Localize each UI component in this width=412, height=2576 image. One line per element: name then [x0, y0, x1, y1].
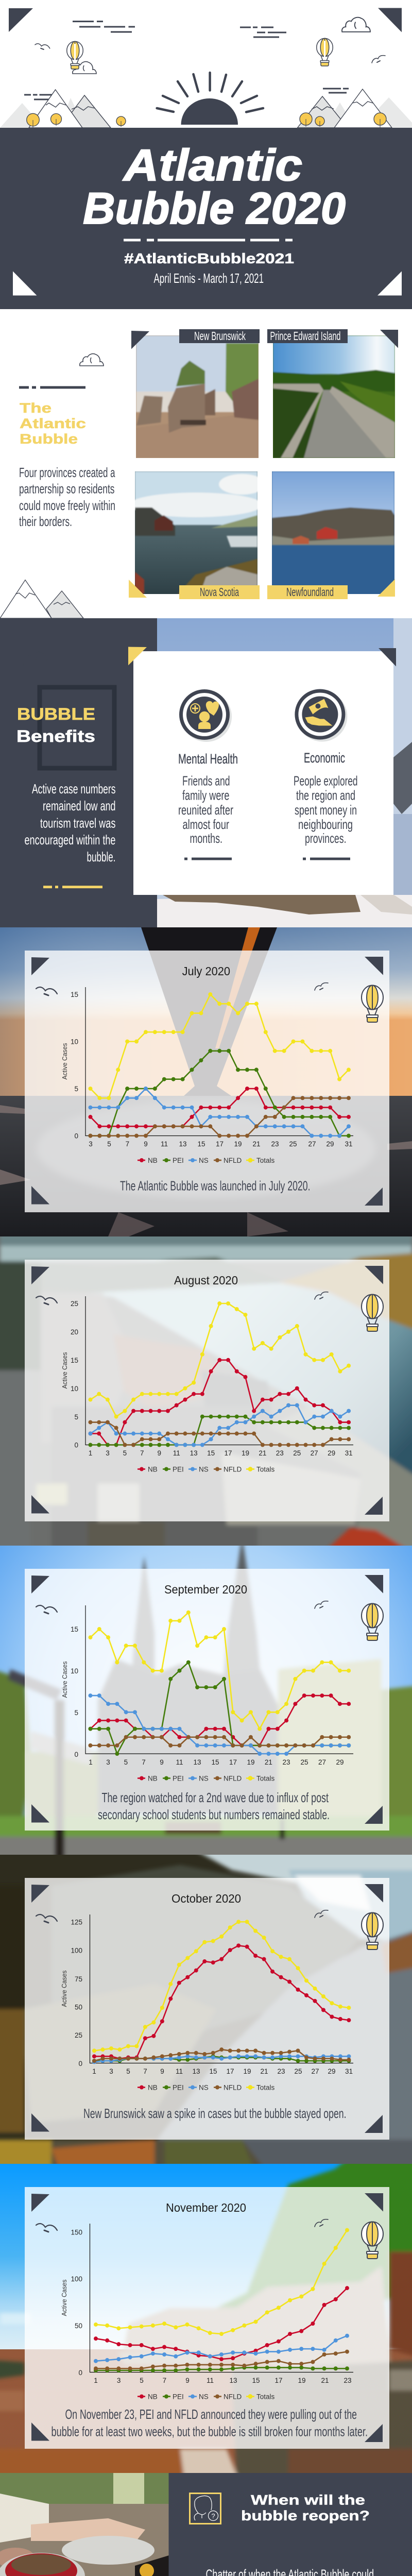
line chart: September 2020: 1	[89, 1758, 93, 1766]
icon: bird	[36, 987, 57, 995]
line chart: August 2020: 5	[74, 1413, 78, 1421]
line chart: October 2020: 125	[71, 1919, 82, 1926]
icon: bird right	[315, 2219, 328, 2227]
line chart: August 2020: Active Cases	[61, 1352, 68, 1389]
corner triangles	[31, 957, 383, 1206]
line chart: July 2020: 0	[74, 1132, 78, 1140]
series: PEI	[94, 2056, 349, 2061]
line chart: September 2020: 11	[176, 1758, 183, 1766]
heading: When will the	[251, 2493, 365, 2508]
icon: bird right	[315, 983, 328, 990]
text: intro paragraph	[19, 465, 115, 529]
legend	[138, 2393, 275, 2401]
line chart: October 2020: 17	[226, 2067, 234, 2075]
legend	[138, 2083, 275, 2092]
heading: Bubble	[20, 431, 78, 447]
series: Totals	[91, 1303, 349, 1417]
chart title: November 2020	[166, 2201, 246, 2214]
line chart: August 2020: 23	[276, 1449, 284, 1457]
legend: NB	[148, 1465, 158, 1473]
series: NFLD	[91, 1422, 349, 1445]
series: NB	[91, 1696, 349, 1745]
panel: September 2020	[0, 1535, 412, 1870]
icon: balloon	[362, 1912, 383, 1950]
province labels: Newfoundland	[286, 585, 334, 599]
chart title: October 2020	[171, 1892, 241, 1905]
series: NFLD	[94, 2049, 349, 2061]
benefit: mental health	[178, 689, 238, 859]
legend	[138, 1774, 275, 1783]
line chart: November 2020: 11	[207, 2377, 214, 2384]
line chart: October 2020: 75	[75, 1975, 82, 1983]
panel: July 2020	[0, 927, 412, 1236]
text	[294, 773, 357, 846]
series: Totals	[91, 1613, 349, 1729]
line chart: September 2020: 23	[282, 1758, 290, 1766]
legend: NFLD	[224, 1465, 242, 1473]
heading	[16, 705, 95, 745]
line chart: November 2020: 3	[117, 2377, 121, 2384]
line chart: August 2020: 15	[207, 1449, 215, 1457]
line chart: September 2020: Active Cases	[61, 1661, 68, 1698]
line chart: August 2020: 13	[190, 1449, 198, 1457]
line chart: July 2020: 11	[161, 1140, 168, 1148]
legend: NS	[199, 2083, 209, 2092]
line chart: October 2020: 13	[192, 2067, 200, 2075]
line chart: September 2020: 9	[160, 1758, 164, 1766]
photo: Prince Edward Island	[273, 335, 395, 458]
icon: bird right	[315, 1910, 328, 1918]
legend: PEI	[173, 1157, 184, 1164]
line chart: August 2020: 15	[71, 1357, 78, 1364]
heading: Atlantic	[20, 416, 86, 431]
translucent card	[25, 951, 389, 1212]
legend: NFLD	[224, 1157, 242, 1164]
line chart: September 2020: 7	[142, 1758, 146, 1766]
text	[178, 773, 233, 846]
line chart: August 2020: 11	[173, 1449, 180, 1457]
series: NS	[91, 1696, 349, 1754]
label: Mental Health	[178, 751, 238, 767]
white benefits card	[133, 651, 393, 895]
legend: Totals	[256, 1157, 275, 1164]
line chart: August 2020: 17	[224, 1449, 232, 1457]
icon: balloon	[362, 985, 383, 1022]
line chart: September 2020: 27	[318, 1758, 326, 1766]
photo: snowy mountain	[157, 618, 412, 927]
legend: Totals	[256, 2393, 275, 2401]
text: intro paragraph: partnership so residents	[19, 481, 114, 497]
line chart: October 2020: 50	[75, 2004, 82, 2011]
icon: balloon	[362, 1603, 383, 1640]
line chart: October 2020: 27	[311, 2067, 319, 2075]
line chart: November 2020: 23	[344, 2377, 352, 2384]
icon: bird	[36, 1296, 57, 1304]
legend: NB	[148, 2083, 158, 2092]
line chart: September 2020: 21	[265, 1758, 272, 1766]
province labels: Nova Scotia	[200, 585, 239, 599]
icon: mental health	[179, 689, 232, 742]
series: Totals	[94, 1922, 349, 2050]
benefit: economic	[294, 689, 357, 859]
line chart: November 2020: 100	[71, 2275, 82, 2283]
line chart: November 2020: 19	[298, 2377, 306, 2384]
line chart: September 2020: 25	[300, 1758, 308, 1766]
legend	[138, 1157, 275, 1164]
chart title: August 2020	[174, 1274, 238, 1287]
line chart: August 2020: 31	[345, 1449, 353, 1457]
line chart: September 2020: 19	[247, 1758, 255, 1766]
line chart: September 2020: 15	[211, 1758, 219, 1766]
corner triangles	[31, 2193, 383, 2442]
hashtag: #AtlanticBubble2021	[124, 250, 294, 266]
icon: cloud	[80, 354, 104, 366]
text: benefits summary: bubble.	[87, 849, 115, 865]
panel: bubble benefits	[0, 618, 412, 927]
line chart: July 2020: 3	[89, 1140, 93, 1148]
legend: NS	[199, 1465, 209, 1473]
line chart: October 2020: 31	[345, 2067, 353, 2075]
translucent card	[25, 1569, 389, 1831]
line chart: September 2020: 5	[124, 1758, 128, 1766]
icon: bird	[36, 2224, 57, 2232]
line chart: August 2020: 9	[158, 1449, 161, 1457]
line chart: July 2020: 15	[71, 991, 78, 998]
line chart: July 2020: 19	[234, 1140, 242, 1148]
series: NFLD	[96, 2352, 347, 2368]
corner triangles	[31, 1266, 383, 1515]
icon: bird	[36, 1914, 57, 1923]
line chart: November 2020: 50	[75, 2322, 82, 2330]
series: NS	[96, 2336, 347, 2361]
line chart: November 2020: 150	[71, 2229, 82, 2236]
line chart: November 2020: 1	[94, 2377, 98, 2384]
line chart: November 2020: Active Cases	[61, 2279, 68, 2316]
line chart: October 2020: 15	[209, 2067, 217, 2075]
series: NS	[91, 1089, 349, 1136]
line chart: August 2020: 0	[74, 1442, 78, 1449]
series: Totals	[96, 2230, 347, 2334]
icon: cloud	[24, 652, 51, 665]
text: provinces.	[305, 831, 346, 846]
title	[83, 141, 346, 233]
line chart: September 2020: 0	[74, 1751, 78, 1758]
line chart: July 2020: 13	[179, 1140, 187, 1148]
legend: Totals	[256, 1774, 275, 1783]
photo: St. John's harbour	[0, 1236, 412, 1546]
heading: BUBBLE	[17, 705, 95, 723]
title: Atlantic	[123, 141, 302, 190]
translucent card	[25, 1260, 389, 1521]
corner triangles	[31, 1575, 383, 1824]
line chart: October 2020: 25	[75, 2031, 82, 2039]
heading: Benefits	[16, 727, 95, 745]
panel: October 2020	[0, 1839, 412, 2179]
legend: NS	[199, 2393, 209, 2401]
text: reunited after	[178, 802, 233, 818]
chart title: September 2020	[164, 1583, 247, 1596]
text: benefits summary: remained low and	[43, 798, 115, 814]
caption	[52, 2406, 368, 2439]
caption: The Atlantic Bubble was launched in July 2020.	[120, 1178, 310, 1194]
legend: NB	[148, 1774, 158, 1783]
text: the region and	[296, 788, 355, 803]
line chart: August 2020: 27	[311, 1449, 318, 1457]
line chart: September 2020: 17	[229, 1758, 237, 1766]
line chart: November 2020: 5	[140, 2377, 144, 2384]
line chart: August 2020: 10	[71, 1385, 78, 1393]
photo: Newfoundland	[272, 471, 394, 594]
illustration: mountains	[0, 580, 83, 618]
line chart: October 2020: 9	[160, 2067, 164, 2075]
line chart: September 2020: 10	[71, 1667, 78, 1675]
line chart: September 2020: 5	[74, 1709, 78, 1717]
icon: balloon	[362, 2222, 383, 2259]
series: NB	[91, 1360, 349, 1445]
series: PEI	[96, 2367, 347, 2370]
panel: the Atlantic Bubble intro	[0, 309, 412, 618]
legend: NB	[148, 2393, 158, 2401]
province labels: New Brunswick	[194, 329, 246, 343]
title: Bubble 2020	[83, 184, 346, 233]
caption	[98, 1790, 330, 1822]
series: Totals	[91, 994, 349, 1098]
text: family were	[182, 788, 230, 803]
photo: Confederation Bridge	[0, 927, 412, 1236]
line chart: August 2020: 19	[242, 1449, 249, 1457]
line chart: August 2020: 29	[328, 1449, 335, 1457]
legend: Totals	[256, 1465, 275, 1473]
text: benefits summary	[25, 781, 115, 865]
line chart: July 2020: 9	[144, 1140, 148, 1148]
text: Friends and	[182, 773, 230, 788]
label: Economic	[304, 750, 345, 766]
text: benefits summary: encouraged within the	[25, 832, 115, 848]
line chart: August 2020: 1	[89, 1449, 92, 1457]
legend: NB	[148, 1157, 158, 1164]
line chart: July 2020: 25	[289, 1140, 297, 1148]
series: NB	[94, 1945, 349, 2059]
legend: PEI	[173, 2083, 184, 2092]
translucent card	[25, 2187, 389, 2449]
line chart: November 2020: 0	[78, 2369, 82, 2377]
line chart: September 2020	[61, 1605, 353, 1783]
text: almost four	[182, 817, 229, 832]
line chart: October 2020: 1	[92, 2067, 96, 2075]
legend: NFLD	[224, 1774, 242, 1783]
icon: economic	[295, 689, 347, 742]
line chart: October 2020: 23	[277, 2067, 285, 2075]
text: months.	[190, 831, 222, 846]
text: intro paragraph: could move freely within	[19, 498, 115, 513]
line chart: October 2020: 5	[126, 2067, 130, 2075]
series: NB	[91, 1089, 349, 1126]
series: NFLD	[91, 1098, 349, 1136]
line chart: November 2020: 7	[163, 2377, 166, 2384]
icon: person with question	[190, 2494, 220, 2523]
heading	[241, 2493, 370, 2523]
legend: NFLD	[224, 2083, 242, 2092]
text: benefits summary: Active case numbers	[32, 781, 115, 796]
icon: bird	[36, 1605, 57, 1614]
line chart: July 2020: 17	[216, 1140, 224, 1148]
photo: food on a table	[0, 2473, 169, 2576]
legend: PEI	[173, 2393, 184, 2401]
line chart: August 2020: 25	[71, 1300, 78, 1308]
legend	[138, 1465, 275, 1473]
line chart: October 2020: 21	[260, 2067, 268, 2075]
series: PEI	[91, 1051, 349, 1136]
panel: when will the bubble reopen	[0, 2473, 412, 2576]
line chart: July 2020: 27	[308, 1140, 316, 1148]
line chart: August 2020: 21	[259, 1449, 266, 1457]
photo: New Brunswick	[136, 335, 259, 458]
province labels	[179, 329, 348, 599]
legend: PEI	[173, 1774, 184, 1783]
line chart: July 2020: 5	[74, 1085, 78, 1093]
line chart: July 2020	[61, 987, 353, 1164]
panel: title header	[0, 0, 412, 309]
line chart: October 2020	[61, 1914, 353, 2092]
line chart: July 2020: 21	[252, 1140, 261, 1148]
line chart: October 2020: Active Cases	[61, 1970, 68, 2007]
line chart: October 2020: 100	[71, 1947, 82, 1955]
line chart: July 2020: 23	[271, 1140, 279, 1148]
line chart: November 2020: 17	[274, 2377, 283, 2384]
series: PEI	[91, 1417, 349, 1445]
line chart: August 2020: 3	[106, 1449, 110, 1457]
line chart: August 2020: 5	[123, 1449, 127, 1457]
series: NFLD	[91, 1737, 349, 1745]
line chart: July 2020: 5	[107, 1140, 111, 1148]
line chart: August 2020: 7	[140, 1449, 144, 1457]
legend: PEI	[173, 1465, 184, 1473]
line chart: August 2020	[61, 1296, 353, 1473]
line chart: September 2020: 13	[193, 1758, 201, 1766]
dark title band	[0, 128, 412, 309]
line chart: July 2020: 29	[326, 1140, 334, 1148]
text: spent money in	[295, 802, 357, 818]
line chart: November 2020: 21	[321, 2377, 329, 2384]
series: NB	[96, 2288, 347, 2359]
photo: Nova Scotia	[135, 471, 258, 594]
text: benefits summary: tourism travel was	[40, 815, 115, 831]
line chart: September 2020: 29	[336, 1758, 344, 1766]
line chart: October 2020: 0	[78, 2060, 82, 2067]
series: NS	[91, 1405, 349, 1445]
line chart: August 2020: 25	[293, 1449, 301, 1457]
panel: August 2020	[0, 1221, 412, 1561]
heading: The	[20, 400, 52, 416]
text: intro paragraph: Four provinces created a	[19, 465, 115, 480]
panel: November 2020	[0, 2148, 412, 2488]
series: PEI	[91, 1663, 349, 1754]
byline: April Ennis - March 17, 2021	[153, 270, 264, 286]
legend: NFLD	[224, 2393, 242, 2401]
decorative frame	[40, 687, 114, 768]
icon: bird right	[315, 1601, 328, 1608]
line chart: October 2020: 7	[143, 2067, 147, 2075]
icon: person with question: ?	[211, 2512, 215, 2520]
line chart: September 2020: 3	[106, 1758, 110, 1766]
series: NS	[94, 2056, 349, 2062]
line chart: July 2020: 10	[71, 1038, 78, 1046]
text: intro paragraph: their borders.	[19, 514, 72, 529]
icon: bird right	[315, 1292, 328, 1299]
line chart: July 2020: 15	[197, 1140, 205, 1148]
line chart: October 2020: 25	[294, 2067, 302, 2075]
line chart: November 2020: 13	[229, 2377, 237, 2384]
line chart: July 2020: 31	[345, 1140, 353, 1148]
line chart: July 2020: 7	[126, 1140, 129, 1148]
line chart: November 2020: 15	[252, 2377, 260, 2384]
chart title: July 2020	[182, 964, 230, 978]
line chart: August 2020: 20	[71, 1328, 78, 1336]
line chart: October 2020: 3	[109, 2067, 113, 2075]
line chart: October 2020: 19	[243, 2067, 251, 2075]
icon: balloon	[362, 1294, 383, 1331]
line chart: November 2020: 9	[185, 2377, 190, 2384]
legend: NS	[199, 1157, 209, 1164]
line chart: October 2020: 29	[328, 2067, 336, 2075]
heading: bubble reopen?	[241, 2508, 370, 2523]
photo: Hopewell Rocks	[0, 2164, 412, 2473]
line chart: November 2020	[61, 2224, 353, 2401]
legend: NS	[199, 1774, 209, 1783]
line chart: September 2020: 15	[71, 1625, 78, 1633]
line chart: July 2020: Active Cases	[61, 1043, 68, 1080]
legend: Totals	[256, 2083, 275, 2092]
text: People explored	[294, 773, 357, 788]
photo: cathedral	[0, 1546, 412, 1855]
corner triangles	[31, 1884, 383, 2133]
line chart: October 2020: 11	[176, 2067, 183, 2075]
text: neighbouring	[298, 817, 353, 832]
province labels: Prince Edward Island	[270, 329, 341, 343]
heading	[20, 400, 86, 447]
photo: Cape Breton highlands	[0, 1855, 412, 2164]
translucent card	[25, 1878, 389, 2140]
illustration: sunrise landscape	[0, 8, 412, 128]
